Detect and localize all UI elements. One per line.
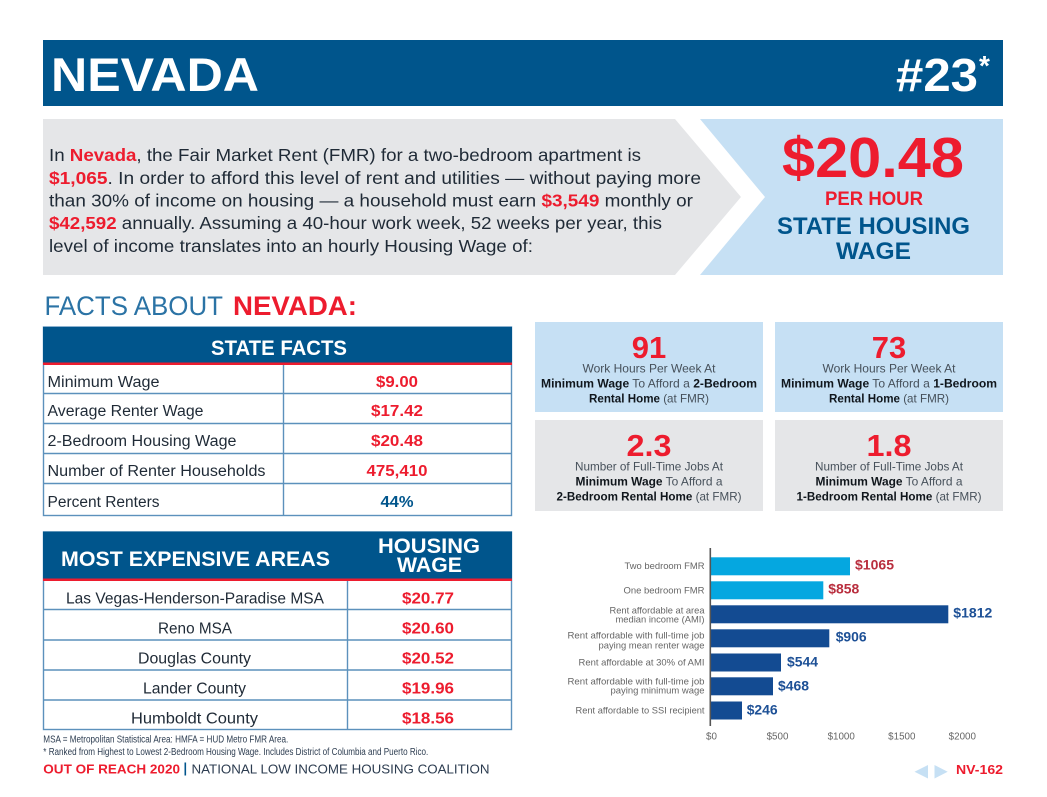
intro text block: than 30% of income on housing — a household must earn $3,549 monthly or (49, 190, 693, 210)
column heading: housing wage: WAGE (397, 553, 462, 577)
panel: intro paragraph arrow (43, 119, 741, 275)
bar values (747, 556, 993, 718)
stat description: Rental Home (at FMR) (589, 392, 709, 406)
stat value 73: 73 (872, 330, 906, 365)
stat value 2.3: 2.3 (626, 428, 672, 463)
category labels: median income (AMI) (616, 614, 704, 624)
category labels: paying mean renter wage (598, 640, 704, 650)
bar values: $1065 (855, 556, 894, 572)
bars (711, 557, 948, 720)
intro text block (49, 145, 701, 256)
row: number of renter households (48, 463, 428, 480)
stat value 1.8: 1.8 (866, 428, 912, 463)
column heading: areas: MOST EXPENSIVE AREAS (61, 547, 330, 571)
footer credit (43, 762, 490, 776)
footnotes: MSA = Metropolitan Statistical Area: HMFA = HUD Metro FMR Area. (43, 734, 288, 746)
stat description: Minimum Wage To Afford a (576, 474, 723, 488)
state housing wage label: WAGE (836, 238, 911, 265)
stat description: Minimum Wage To Afford a (816, 474, 963, 488)
stat description: Number of Full-Time Jobs At (575, 460, 724, 474)
row: number of renter households: Number of Renter Households (48, 463, 266, 480)
row: Douglas County: Douglas County (138, 650, 251, 668)
row: 2-bedroom housing wage: 2-Bedroom Housing Wage (48, 433, 236, 450)
intro text block: $42,592 annually. Assuming a 40-hour work week, 52 weeks per year, this (49, 213, 662, 233)
intro text block: In Nevada , the Fair Market Rent (FMR) for a two-bedroom apartment is (49, 145, 641, 165)
stat card: work hours 1-bedroom (775, 322, 1003, 412)
row: average renter wage (48, 403, 423, 420)
row: Humboldt County: $18.56 (402, 710, 454, 728)
bar values: $544 (787, 654, 818, 670)
stat description (781, 362, 997, 406)
x axis ticks: $1000 (828, 731, 855, 742)
row: Humboldt County (131, 710, 454, 728)
row: Lander County (143, 680, 454, 698)
footnotes: * Ranked from Highest to Lowest 2-Bedroom Housing Wage. Includes District of Columbia and Puerto Rico. (43, 747, 428, 758)
x axis ticks: $1500 (888, 731, 916, 742)
stat description: Minimum Wage To Afford a 1-Bedroom (781, 376, 997, 390)
table: state facts (43, 327, 512, 516)
x axis ticks (706, 731, 976, 742)
panel: state housing wage callout (700, 119, 1003, 275)
table: most expensive areas (43, 532, 512, 730)
row: Douglas County (138, 650, 454, 668)
row: 2-bedroom housing wage: $20.48 (371, 433, 423, 450)
row: average renter wage: Average Renter Wage (48, 403, 204, 420)
row: number of renter households: 475,410 (366, 463, 428, 480)
bar chart: rents (568, 548, 993, 742)
row: minimum wage: $9.00 (376, 374, 418, 391)
category labels: Rent affordable to SSI recipient (576, 704, 705, 715)
category labels (568, 560, 705, 715)
stat card: jobs 2-bedroom (535, 420, 763, 511)
rank asterisk: * (979, 50, 990, 81)
row: Reno: Reno MSA (158, 620, 233, 638)
row: Lander County: Lander County (143, 680, 246, 698)
footer credit: OUT OF REACH 2020 (43, 762, 180, 776)
bar values: $468 (778, 678, 809, 694)
x axis ticks: $2000 (949, 731, 976, 742)
row: Lander County: $19.96 (402, 680, 454, 698)
row: Las Vegas: $20.77 (402, 590, 454, 608)
heading: facts about Nevada: FACTS ABOUT (44, 291, 223, 321)
stat description: Work Hours Per Week At (822, 362, 956, 376)
category labels: paying minimum wage (610, 685, 704, 696)
row: Humboldt County: Humboldt County (131, 710, 258, 728)
row: Reno: $20.60 (402, 620, 454, 638)
row: percent renters: 44% (380, 494, 414, 511)
stat description: Work Hours Per Week At (582, 362, 716, 376)
stat description (556, 460, 742, 504)
category labels: Two bedroom FMR (624, 560, 705, 571)
category labels: Rent affordable with full-time job (568, 675, 704, 686)
page number: NV-162 (956, 762, 1003, 777)
heading: facts about Nevada (44, 291, 357, 321)
stat description: 1-Bedroom Rental Home (at FMR) (796, 490, 982, 504)
column heading: housing wage: HOUSING (378, 534, 480, 558)
bar values: $906 (836, 629, 867, 645)
table heading: STATE FACTS (211, 337, 347, 360)
row: Las Vegas (66, 590, 454, 608)
category labels: Rent affordable at 30% of AMI (578, 657, 704, 668)
header banner (43, 40, 1003, 106)
row: average renter wage: $17.42 (371, 403, 423, 420)
row: Reno (158, 620, 454, 638)
stat description: 2-Bedroom Rental Home (at FMR) (556, 490, 742, 504)
bar values: $858 (828, 581, 860, 597)
category labels: Rent affordable at area (610, 604, 705, 615)
stat description (541, 362, 757, 406)
row: percent renters: Percent Renters (48, 494, 160, 511)
bar values: $246 (747, 702, 778, 718)
stat card: jobs 1-bedroom (775, 420, 1003, 511)
stat value 91: 91 (632, 330, 666, 365)
category labels: One bedroom FMR (624, 584, 705, 595)
bar values: $1812 (953, 605, 993, 621)
x axis ticks: $500 (767, 731, 789, 742)
stat description: Minimum Wage To Afford a 2-Bedroom (541, 376, 757, 390)
per hour label: PER HOUR (825, 189, 923, 210)
stat description: Number of Full-Time Jobs At (815, 460, 964, 474)
row: percent renters (48, 494, 414, 511)
footer credit: NATIONAL LOW INCOME HOUSING COALITION (192, 762, 490, 776)
stat description: Rental Home (at FMR) (829, 392, 949, 406)
row: 2-bedroom housing wage (48, 433, 423, 450)
intro text block: level of income translates into an hourly Housing Wage of: (49, 236, 533, 256)
icon: page navigation arrows (914, 765, 948, 778)
state housing wage label (777, 213, 970, 265)
heading: facts about Nevada: NEVADA: (233, 291, 357, 321)
state rank: #23 (896, 49, 978, 101)
stat card: work hours 2-bedroom (535, 322, 763, 412)
intro text block: $1,065 . In order to afford this level of rent and utilities — without paying more (49, 168, 701, 188)
category labels: Rent affordable with full-time job (568, 629, 704, 640)
x axis ticks: $0 (706, 731, 717, 742)
row: minimum wage (48, 374, 418, 391)
title: state name: NEVADA (51, 48, 259, 101)
row: Las Vegas: Las Vegas-Henderson-Paradise MSA (66, 590, 325, 608)
footnotes (43, 734, 428, 758)
row: Douglas County: $20.52 (402, 650, 454, 668)
column heading: housing wage (378, 534, 480, 577)
housing wage figure: $20.48 (782, 126, 964, 190)
state housing wage label: STATE HOUSING (777, 213, 970, 240)
stat description (796, 460, 982, 504)
row: minimum wage: Minimum Wage (48, 374, 160, 391)
